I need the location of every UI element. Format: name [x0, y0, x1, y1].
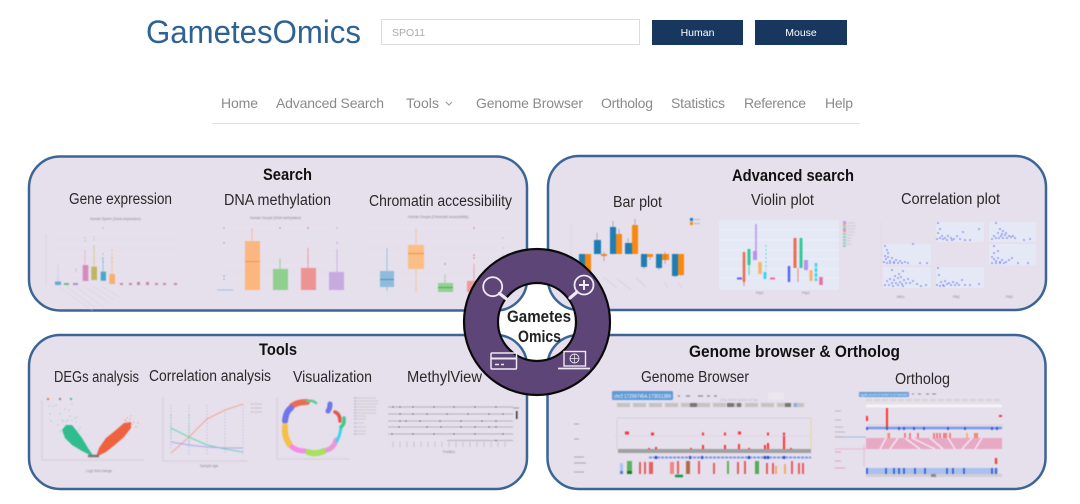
chart: violin plot — [719, 220, 856, 295]
chart: violin plot: Fkp2 — [802, 291, 810, 295]
chart: correlation line plot — [163, 397, 262, 468]
button: Human — [652, 20, 743, 45]
logo text: Omics — [518, 327, 561, 346]
chart: chromatin accessibility box plot: Human Oocyte (Chromatin accessibility) — [408, 215, 468, 219]
icon: card — [491, 353, 516, 369]
central ring logo — [464, 249, 610, 395]
panel: Search — [29, 156, 527, 311]
chart: chromatin accessibility box plot — [368, 215, 516, 292]
navigation menu: Genome Browser — [476, 95, 583, 111]
heading: Advanced search: Advanced search — [732, 167, 854, 185]
chart: volcano plot — [42, 398, 144, 473]
button: Mouse — [755, 20, 847, 45]
navigation menu: Home — [221, 95, 258, 111]
subheading: MethylView: MethylView — [407, 369, 483, 386]
chart: DNA methylation box plot — [217, 216, 348, 290]
subheading: Chromatin accessibility: Chromatin accessibility — [369, 193, 512, 210]
navigation menu: Statistics — [671, 95, 725, 111]
chart: ortholog tracks — [835, 392, 1003, 477]
panel: Tools — [29, 335, 527, 489]
chart: gene expression box plot — [46, 217, 180, 311]
subheading: Ortholog: Ortholog — [895, 371, 950, 388]
chart: gene expression box plot: Human Sperm (Gene expression) — [90, 217, 141, 221]
site title: GametesOmics — [146, 14, 361, 50]
navigation menu: Reference — [744, 95, 806, 111]
subheading: Bar plot: Bar plot — [613, 194, 663, 211]
subheading: Gene expression: Gene expression — [69, 191, 172, 208]
chart: correlation scatter matrix — [881, 222, 1036, 299]
button: Mouse: Mouse — [785, 27, 817, 39]
chart: correlation line plot: Sample age — [200, 464, 218, 468]
chart: bar plot — [571, 218, 700, 290]
icon: laptop with globe — [558, 352, 590, 368]
chart: ortholog tracks: hg38:chr20:57329073-57344302 — [860, 393, 908, 397]
heading: Search: Search — [263, 166, 312, 184]
logo text: Gametes — [507, 307, 571, 326]
chart: MethylView lollipop tracks: Position — [443, 450, 455, 454]
chart: genome browser tracks: chr2:172997454-173011389 — [614, 394, 671, 400]
panel: Advanced search — [548, 156, 1046, 310]
chart: MethylView lollipop tracks — [388, 407, 519, 454]
panel: Genome browser & Ortholog — [548, 335, 1046, 489]
subheading: Visualization: Visualization — [293, 369, 372, 386]
chart: violin plot: Fkp1 — [756, 291, 764, 295]
navigation menu — [212, 95, 860, 124]
subheading: DEGs analysis: DEGs analysis — [54, 369, 139, 386]
navigation menu: Tools — [406, 95, 439, 111]
chart: ring scatter visualization — [277, 398, 378, 459]
heading: Genome browser & Ortholog: Genome browser & Ortholog — [689, 343, 900, 361]
chart: genome browser tracks — [574, 391, 811, 476]
subheading: Violin plot: Violin plot — [751, 192, 815, 209]
chart: correlation scatter matrix: Ptk2 — [1006, 295, 1013, 299]
icon: magnifier — [483, 277, 506, 299]
subheading: Correlation analysis: Correlation analysis — [149, 368, 271, 385]
search input: SPO11 — [392, 27, 425, 39]
logo text — [507, 307, 571, 346]
search input — [382, 20, 640, 44]
chart: genome browser tracks: One pixel spans 17 bp — [720, 398, 758, 402]
navigation menu: Advanced Search — [276, 95, 384, 111]
navigation menu: Help — [825, 95, 853, 111]
chart: volcano plot: Log2 fold change — [86, 469, 112, 473]
navigation menu: Ortholog — [601, 95, 653, 111]
subheading: Genome Browser: Genome Browser — [641, 369, 749, 386]
chart: correlation scatter matrix: Ptk2 — [953, 295, 960, 299]
icon: magnifier with plus — [570, 276, 594, 298]
chart: correlation scatter matrix: Mfn1 — [897, 295, 905, 299]
chart: DNA methylation box plot: Human Oocyte (DNA methylation) — [250, 216, 301, 220]
subheading: Correlation plot: Correlation plot — [901, 191, 1001, 208]
subheading: DNA methylation: DNA methylation — [224, 192, 331, 209]
heading: Tools: Tools — [259, 341, 297, 359]
button: Human: Human — [681, 27, 715, 39]
